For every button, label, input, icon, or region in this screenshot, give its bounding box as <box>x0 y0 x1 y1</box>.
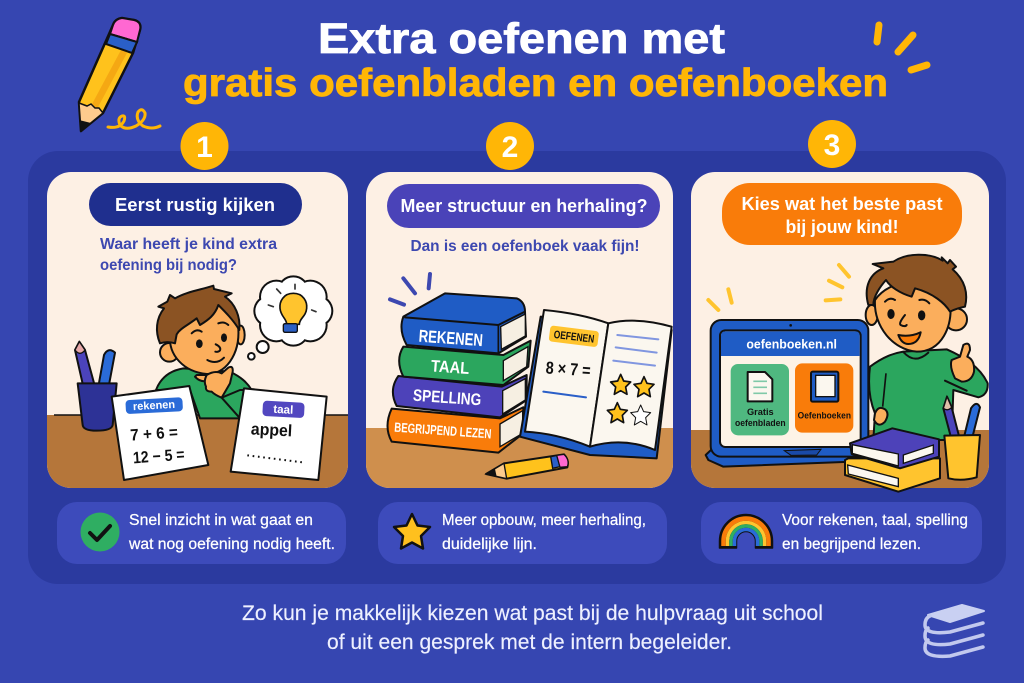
tile: gratis oefenbladen: Gratis <box>747 407 774 417</box>
books on table <box>845 428 940 492</box>
green book: taal <box>399 341 531 385</box>
footer text <box>242 602 823 654</box>
step number 3: 3 <box>824 129 840 162</box>
summary text 3 <box>782 512 968 553</box>
tag: oefenen <box>549 325 599 347</box>
step number 2 <box>486 122 534 170</box>
icon: rainbow <box>720 514 772 548</box>
heading pill 2 <box>387 184 660 228</box>
site name: oefenboeken.nl <box>746 338 837 352</box>
purple book: spelling <box>393 375 527 417</box>
footer text: Zo kun je makkelijk kiezen wat past bij de hulpvraag uit school <box>242 602 823 625</box>
question text: Waar heeft je kind extra <box>100 236 277 253</box>
tile: oefenboeken: Oefenboeken <box>798 411 851 421</box>
subheading: Dan is een oefenboek vaak fijn! <box>410 238 640 255</box>
illustration: happy boy <box>866 255 988 440</box>
heading pill 1: Eerst rustig kijken <box>115 194 275 215</box>
illustration: book stack and open workbook <box>387 274 672 479</box>
blue book: rekenen: REKENEN <box>418 326 484 350</box>
tag: oefenen: OEFENEN <box>553 329 595 346</box>
tag: taal: taal <box>273 403 294 417</box>
summary text 2: Meer opbouw, meer herhaling, <box>442 512 646 529</box>
green book: taal: TAAL <box>430 356 470 378</box>
sparks near boy <box>826 265 849 300</box>
summary strip 1 <box>57 502 346 564</box>
illustration: thinking boy <box>156 286 252 418</box>
pencil on table <box>486 454 568 479</box>
icon: title sparkles <box>877 25 927 70</box>
summary text 3: en begrijpend lezen. <box>782 536 921 553</box>
icon: thought bubble with light bulb <box>248 275 333 360</box>
icon: star <box>394 514 430 548</box>
summary strip 2 <box>378 502 667 564</box>
summary text 3: Voor rekenen, taal, spelling <box>782 512 968 529</box>
summary text 1: wat nog oefening nodig heeft. <box>128 536 335 553</box>
tile: gratis oefenbladen <box>731 364 789 435</box>
purple book: spelling: SPELLING <box>412 386 482 409</box>
icon: check mark <box>80 512 120 552</box>
panel: steps container <box>28 151 1006 584</box>
sums <box>130 423 185 467</box>
icon: pen cup <box>75 342 117 431</box>
heading pill 2: Meer structuur en herhaling? <box>400 195 648 216</box>
panel: card 3 <box>691 172 989 492</box>
question text <box>100 236 277 274</box>
blue book: rekenen <box>401 293 526 353</box>
title <box>183 15 888 105</box>
orange book: begrijpend lezen <box>387 407 523 453</box>
icon: pencil with squiggle <box>79 18 160 131</box>
summary text 2 <box>442 512 646 553</box>
tag: rekenen: rekenen <box>133 399 176 413</box>
title: Extra oefenen met <box>318 15 725 63</box>
word: appel: appel <box>250 419 293 440</box>
summary text 1 <box>128 512 335 553</box>
panel: card 1 <box>47 172 348 488</box>
worksheet: taal <box>231 388 327 480</box>
sums: 12 − 5 = <box>132 446 185 467</box>
orange book: begrijpend lezen: BEGRIJPEND LEZEN <box>394 420 492 441</box>
tile: oefenboeken <box>795 363 853 433</box>
footer text: of uit een gesprek met de intern begeleider. <box>327 631 732 654</box>
question text: oefening bij nodig? <box>100 257 237 274</box>
heading pill 3 <box>722 183 962 245</box>
step number 1: 1 <box>196 131 213 164</box>
sums: 7 + 6 = <box>130 423 178 445</box>
panel: card 2 <box>366 172 673 488</box>
summary text 1: Snel inzicht in wat gaat en <box>129 512 313 529</box>
pen cup <box>943 397 980 480</box>
tile: gratis oefenbladen: oefenbladen <box>735 418 786 428</box>
worksheet: rekenen <box>112 386 208 480</box>
heading pill 1 <box>89 183 302 226</box>
heading pill 3: Kies wat het beste past <box>742 193 942 214</box>
summary text 2: duidelijke lijn. <box>442 536 537 553</box>
open workbook <box>520 310 672 458</box>
sparks <box>390 274 430 305</box>
sparks <box>708 289 732 310</box>
illustration: laptop <box>706 265 980 492</box>
step number 2: 2 <box>502 131 518 164</box>
title: gratis oefenbladen en oefenboeken <box>183 62 888 105</box>
step number 1 <box>180 122 228 170</box>
step number 3 <box>808 120 856 168</box>
sum: 8 × 7 = <box>545 357 591 380</box>
star ratings <box>607 374 654 425</box>
summary strip 3 <box>701 502 982 564</box>
icon: book stack logo <box>925 605 984 656</box>
heading pill 3: bij jouw kind! <box>786 216 898 237</box>
